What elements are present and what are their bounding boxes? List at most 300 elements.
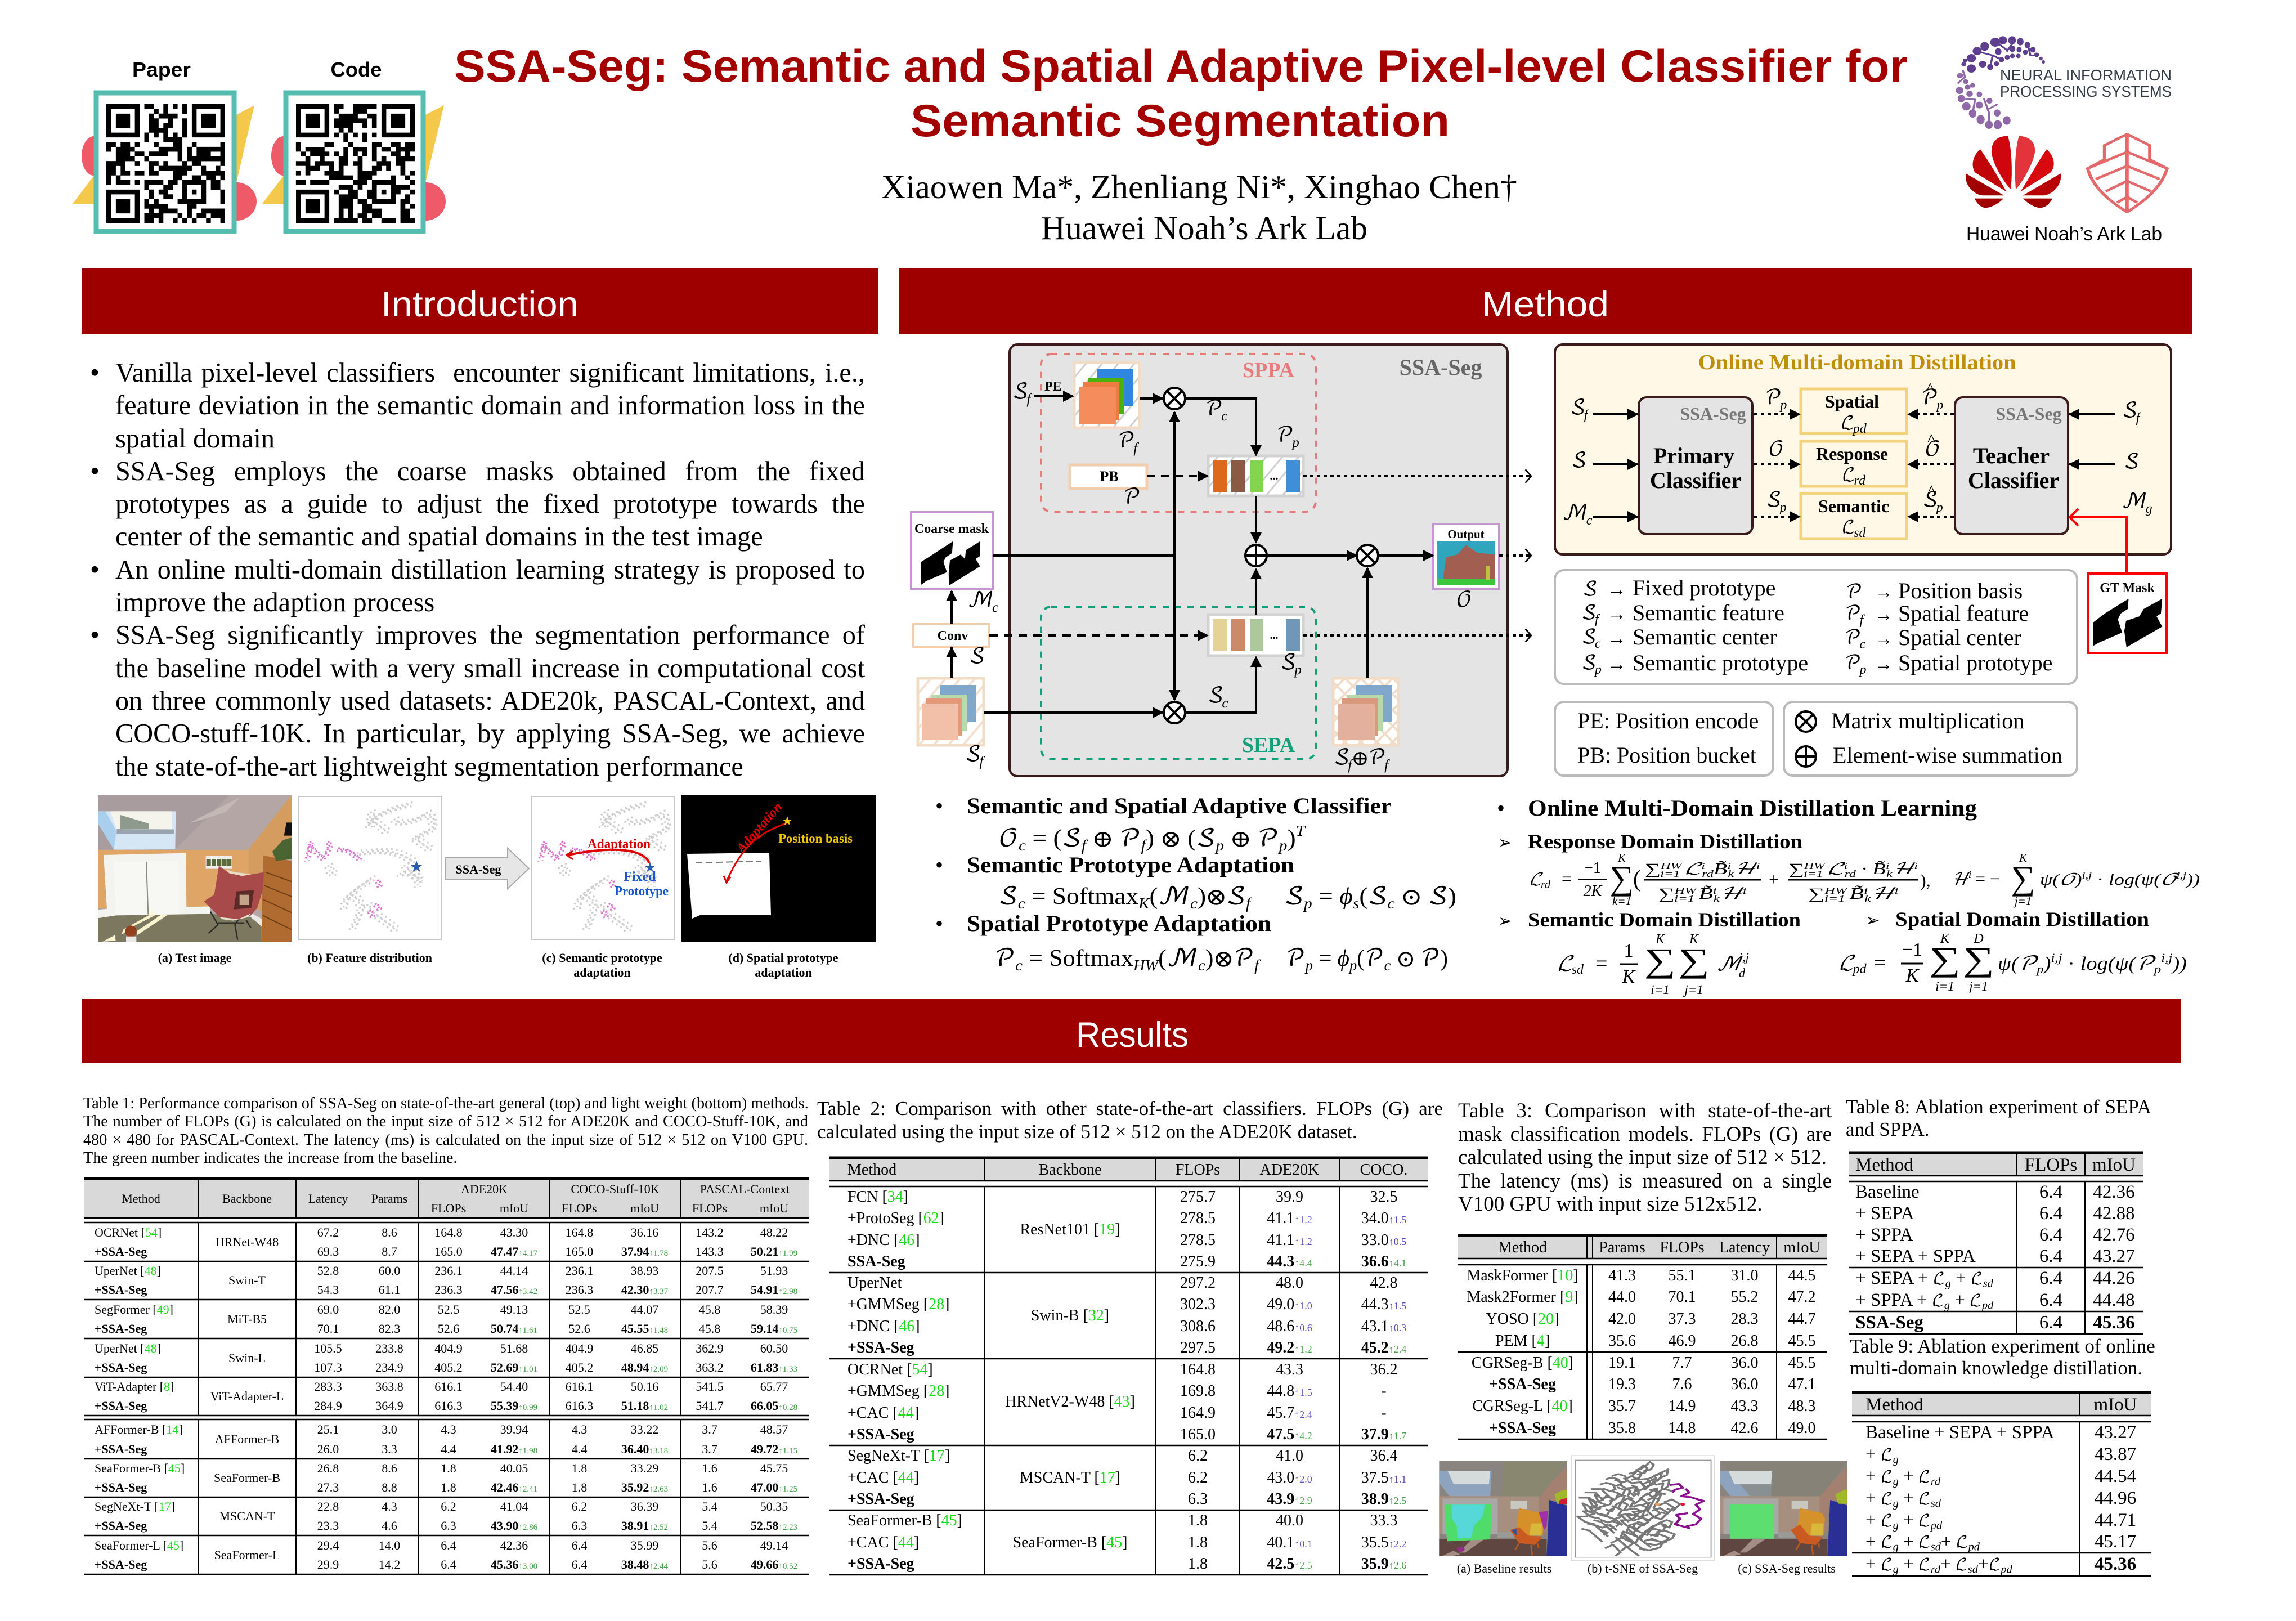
equation: semantic loss: ∑ <box>1678 942 1710 979</box>
table 2: 32.5 <box>1370 1188 1398 1206</box>
table 2: 297.5 <box>1180 1339 1216 1356</box>
equation: response loss: = − <box>1975 868 2000 889</box>
table 3: YOSO [20] <box>1486 1310 1559 1327</box>
qr decoration <box>73 105 257 221</box>
equation: K <box>1138 895 1151 912</box>
table 8: 44.48 <box>2093 1290 2135 1310</box>
table 1: 5.4 <box>702 1519 718 1533</box>
equation: ) ⊗ (𝒮 <box>1146 826 1216 852</box>
arrows: data flow <box>952 396 1531 713</box>
table 9: + ℒg + ℒrd+ ℒsd+ℒpd <box>1866 1554 2012 1576</box>
table 1: ViT-Adapter [8] <box>95 1380 174 1394</box>
table 2: 308.6 <box>1180 1317 1216 1335</box>
table 1: 47.00↑1.25 <box>751 1480 797 1494</box>
table 2: +GMMSeg [28] <box>847 1296 949 1313</box>
table 2: 41.1↑1.2 <box>1267 1232 1312 1248</box>
figure: semantic prototype adaptation: ★ <box>644 861 656 875</box>
table 1: 38.48↑2.44 <box>621 1557 668 1571</box>
legend: symbols: Fixed prototype <box>1633 575 1775 601</box>
table 2 <box>847 1161 1407 1573</box>
math labels: ℳ <box>967 589 994 612</box>
table 2: Method <box>847 1161 896 1179</box>
table 1: 362.9 <box>696 1341 724 1355</box>
table 1: +SSA-Seg <box>95 1442 147 1456</box>
legend: symbols: → <box>1874 629 1893 650</box>
title <box>454 41 1908 146</box>
loss boxes: Spatial <box>1825 391 1879 411</box>
math labels: p <box>1935 500 1943 515</box>
equation: spatial loss: p <box>2153 962 2161 976</box>
math labels: 𝒫 <box>1765 386 1782 409</box>
table 3: 35.6 <box>1608 1332 1636 1350</box>
legend: symbols: p <box>1594 662 1602 677</box>
section bar: Results: Results <box>1076 1015 1189 1055</box>
table 1: 60.50 <box>760 1341 788 1355</box>
table 1: 39.94 <box>500 1422 528 1436</box>
table 1: 48.57 <box>760 1422 788 1436</box>
equation: )⊗𝒫 <box>1205 946 1254 971</box>
table 2: 40.1↑0.1 <box>1267 1533 1312 1551</box>
equation: semantic loss: = <box>1595 952 1607 975</box>
table 8: FLOPs <box>2025 1155 2077 1175</box>
math labels: 𝒫 <box>1205 397 1223 420</box>
table 9: 43.87 <box>2095 1444 2136 1465</box>
equation: response loss: i <box>1701 861 1705 871</box>
table 1: SeaFormer-L <box>214 1548 280 1561</box>
math labels: c <box>992 600 998 615</box>
table 2: 37.9↑1.7 <box>1361 1426 1406 1443</box>
legend: symbols: → <box>1607 604 1626 625</box>
table 3: 48.3 <box>1788 1397 1815 1415</box>
table 1: 6.4 <box>441 1538 456 1552</box>
captions: result figures: (c) SSA-Seg results <box>1738 1561 1836 1575</box>
table 1: 236.3 <box>434 1283 463 1297</box>
table 3: 44.0 <box>1608 1288 1636 1306</box>
table 1: 23.3 <box>317 1519 339 1533</box>
introduction text: SSA-Seg employs the coarse masks obtained from the fixed <box>115 456 865 486</box>
table 8: 45.36 <box>2093 1313 2135 1333</box>
subheading: response: ➢ <box>1498 834 1512 852</box>
table 2: +SSA-Seg <box>847 1426 914 1443</box>
table 1: COCO-Stuff-10K <box>571 1182 660 1196</box>
heading: • <box>935 911 943 936</box>
table 1: 47.56↑3.42 <box>491 1283 537 1297</box>
table 8: + SEPA + SPPA <box>1855 1246 1976 1266</box>
equation: = Softmax <box>1025 884 1138 910</box>
table 2: COCO. <box>1360 1161 1407 1179</box>
table 2: 40.0 <box>1276 1512 1303 1529</box>
logo: Noah's Ark <box>2088 133 2167 212</box>
equation: spatial loss: i,j <box>2051 951 2062 965</box>
table 1: 67.2 <box>317 1225 339 1239</box>
table 1: 405.2 <box>434 1360 463 1374</box>
table 2: 41.1↑1.2 <box>1267 1210 1312 1227</box>
table 8: 6.4 <box>2039 1268 2062 1288</box>
introduction text: Vanilla pixel-level classifiers encounter significant limitations, i.e., <box>115 358 865 388</box>
table 1: 45.8 <box>699 1322 720 1336</box>
table 1: UperNet [48] <box>95 1341 161 1355</box>
table 8: 42.76 <box>2093 1225 2135 1245</box>
table 1: 1.8 <box>572 1461 587 1475</box>
table 1: FLOPs <box>562 1201 597 1215</box>
table 2: 1.8 <box>1188 1512 1208 1529</box>
table 1: +SSA-Seg <box>95 1399 147 1413</box>
equation: response loss: B̃ <box>1849 885 1864 903</box>
subheading: spatial: ➢ <box>1866 911 1880 930</box>
equation: spatial loss: i,j <box>2161 951 2172 965</box>
table 1: 4.4 <box>572 1442 587 1456</box>
table 9 caption <box>1850 1335 2153 1379</box>
table 8: mIoU <box>2092 1155 2136 1175</box>
table 2: 302.3 <box>1180 1296 1216 1313</box>
equation: response loss: k <box>1886 868 1893 879</box>
legend: symbols: 𝒮 <box>1581 626 1597 648</box>
math labels: f <box>1348 758 1353 773</box>
equation: response loss: = <box>1562 868 1572 889</box>
table 1: 51.18↑1.02 <box>621 1399 668 1413</box>
table 1: 36.39 <box>631 1499 658 1513</box>
table 1: 143.2 <box>696 1225 724 1239</box>
equation: response loss: rd <box>1541 879 1551 891</box>
equation: response loss: ℋ <box>1734 861 1758 878</box>
math labels: 𝒮 <box>1280 651 1296 674</box>
coarse mask <box>911 512 993 589</box>
table 1: 43.90↑2.86 <box>491 1519 537 1533</box>
section bar: Method <box>899 268 2192 334</box>
table 1: 107.3 <box>314 1360 342 1374</box>
equation: response loss: K <box>2019 851 2028 865</box>
table 3: 42.6 <box>1731 1420 1758 1436</box>
table 2: 43.0↑2.0 <box>1267 1469 1312 1486</box>
table 3: 45.5 <box>1788 1332 1815 1350</box>
table 1: 51.68 <box>500 1341 528 1355</box>
equation: response loss: B̃ <box>1714 861 1727 878</box>
table 2: 34.0↑1.5 <box>1361 1210 1406 1227</box>
table 3: FLOPs <box>1660 1238 1705 1256</box>
PB box <box>1070 465 1147 489</box>
table 2: 39.9 <box>1276 1188 1303 1206</box>
table 2: 297.2 <box>1180 1274 1216 1292</box>
SEPA module <box>1041 607 1316 759</box>
equation: 𝒫 <box>994 946 1014 971</box>
table 8: + SPPA <box>1855 1225 1913 1245</box>
figure: spatial prototype adaptation <box>681 795 876 942</box>
table 1: 52.58↑2.23 <box>751 1519 797 1533</box>
table 3: 47.2 <box>1788 1288 1815 1306</box>
equation: c <box>1015 957 1023 974</box>
equation: semantic loss: ℳ <box>1716 954 1743 975</box>
legend: symbols: Spatial prototype <box>1898 650 2052 675</box>
equation: semantic loss: K <box>1689 932 1699 947</box>
equation: response loss: k <box>1728 868 1734 879</box>
table 3: +SSA-Seg <box>1489 1376 1556 1393</box>
math labels: 𝒮 <box>1922 489 1938 511</box>
table 9: + ℒg + ℒsd+ ℒpd <box>1866 1532 1980 1553</box>
table 1: 61.83↑1.33 <box>751 1360 797 1374</box>
table 1: Swin-T <box>228 1273 266 1287</box>
table 2: +ProtoSeg [62] <box>847 1210 944 1227</box>
legend: operators: Matrix multiplication <box>1831 708 2024 733</box>
table 2: 42.5↑2.5 <box>1267 1555 1312 1573</box>
table 1: 234.9 <box>375 1360 403 1374</box>
equation: response loss: k <box>1864 893 1871 904</box>
conv box <box>913 624 989 647</box>
table 1: 33.22 <box>631 1422 658 1436</box>
equation: response loss: ), <box>1920 870 1931 890</box>
table 2: 38.9↑2.5 <box>1361 1490 1406 1508</box>
affiliation: Huawei Noah’s Ark Lab <box>1041 209 1367 247</box>
table 1: 50.74↑1.61 <box>491 1322 537 1336</box>
table 3: MaskFormer [10] <box>1467 1266 1578 1284</box>
equation: = <box>1313 946 1338 971</box>
table 1: HRNet-W48 <box>216 1235 279 1248</box>
text: • <box>90 358 100 388</box>
section bar: Introduction: Introduction <box>381 285 579 324</box>
table 1: 45.55↑1.48 <box>621 1322 668 1336</box>
table 1: 26.0 <box>317 1442 339 1456</box>
equation: response loss: + <box>1769 869 1779 889</box>
equation: response loss: ℋ <box>1720 885 1745 903</box>
equation: HW <box>1133 957 1160 974</box>
table 8: 6.4 <box>2039 1203 2062 1224</box>
table 1: mIoU <box>630 1201 659 1215</box>
equation: semantic loss: K <box>1622 966 1636 987</box>
table 2 frame <box>829 1158 1428 1575</box>
table 2 caption: calculated using the input size of 512 × 512 on the ADE20K dataset. <box>817 1121 1357 1143</box>
table 1: 5.6 <box>702 1538 718 1552</box>
table 3: PEM [4] <box>1495 1332 1550 1350</box>
header: code QR <box>262 58 446 231</box>
table 1: 35.99 <box>631 1538 658 1552</box>
equation: spatial loss: pd <box>1852 962 1867 977</box>
table 1: 45.36↑3.00 <box>491 1557 537 1571</box>
heading: • <box>1497 795 1505 821</box>
table 2: 45.7↑2.4 <box>1267 1404 1312 1422</box>
table 1: 45.8 <box>699 1302 720 1316</box>
table 1: 1.8 <box>441 1461 456 1475</box>
legend: symbols: 𝒫 <box>1846 581 1863 603</box>
table 1: 8.8 <box>382 1480 397 1494</box>
table 1: +SSA-Seg <box>95 1557 147 1571</box>
equation: response loss: i <box>1864 885 1868 896</box>
table 2: 47.5↑4.2 <box>1267 1426 1312 1443</box>
table 1: 46.85 <box>631 1341 658 1355</box>
title: SSA-Seg: Semantic and Spatial Adaptive Pixel-level Classifier for <box>454 41 1908 92</box>
table 3 caption: mask classification models. FLOPs (G) are <box>1458 1122 1832 1146</box>
table 1: 3.7 <box>702 1442 718 1456</box>
table 1: 6.4 <box>572 1538 587 1552</box>
equation: response loss: i <box>1756 861 1760 871</box>
table 8: 6.4 <box>2039 1313 2062 1333</box>
heading: Semantic and Spatial Adaptive Classifier <box>967 793 1392 818</box>
equation: c <box>1198 957 1205 974</box>
table 1: 236.1 <box>566 1264 593 1278</box>
table 2: 278.5 <box>1180 1232 1216 1248</box>
table 1: 54.3 <box>317 1283 339 1297</box>
qr card <box>96 93 234 231</box>
table 1 caption: 480 × 480 for PASCAL-Context. The latency (ms) is calculated on the input size of 512 × 512 on V100 GPU. <box>83 1131 808 1149</box>
table 1 caption <box>83 1095 809 1167</box>
table 1: Latency <box>308 1192 348 1206</box>
table 3: 41.3 <box>1608 1266 1636 1284</box>
table 1: 25.1 <box>317 1422 339 1436</box>
equation: c <box>1388 895 1395 912</box>
table 8 caption <box>1846 1096 2151 1140</box>
table 9 <box>1852 1394 2151 1576</box>
table 2: 36.4 <box>1370 1447 1398 1465</box>
table 1: 58.39 <box>760 1302 788 1316</box>
equation: ⊙ 𝒮) <box>1395 884 1456 910</box>
math labels: 𝒫 <box>1118 429 1135 453</box>
table 1: 66.05↑0.28 <box>751 1399 797 1413</box>
math labels: f <box>2136 411 2142 426</box>
math labels: c <box>1586 513 1593 528</box>
table 2: SSA-Seg <box>847 1253 905 1270</box>
equation: response loss: i,j <box>2082 870 2092 881</box>
equation: response loss: i <box>1894 885 1899 896</box>
equation: f <box>1082 837 1088 854</box>
table 1: 207.7 <box>696 1283 724 1297</box>
math labels: f <box>1133 441 1139 456</box>
lab name: Huawei Noah’s Ark Lab <box>1966 223 2162 245</box>
table 1: 29.9 <box>317 1557 339 1571</box>
table 8: + SPPA + ℒg + ℒpd <box>1855 1290 1993 1312</box>
table 2: 41.0 <box>1276 1447 1303 1465</box>
GT mask <box>2070 509 2167 653</box>
heading: • <box>935 852 943 877</box>
table 1: 49.72↑1.15 <box>751 1442 797 1456</box>
table 1: 616.1 <box>434 1380 463 1394</box>
equation: ⊕ 𝒫 <box>1224 826 1279 852</box>
equation: f <box>1254 957 1261 974</box>
table 2: Swin-B [32] <box>1031 1307 1109 1324</box>
legend: symbols: Semantic center <box>1633 624 1777 650</box>
table 9: + ℒg + ℒrd <box>1866 1466 1940 1488</box>
table 2: 165.0 <box>1180 1426 1216 1443</box>
table 2: 33.0↑0.5 <box>1361 1232 1406 1248</box>
semantic prototype block: ... <box>1270 629 1279 642</box>
equation: s <box>1353 895 1359 912</box>
table 1: AFFormer-B <box>215 1432 279 1446</box>
equation: )⊗𝒮 <box>1198 884 1246 910</box>
label: SSA-Seg: SSA-Seg <box>1400 355 1482 380</box>
section bar: Introduction <box>82 268 878 334</box>
equation: response loss: ∑ <box>1610 859 1634 897</box>
equation: response loss: i <box>1727 861 1731 871</box>
subheading: spatial: Spatial Domain Distillation <box>1895 908 2149 930</box>
equation: response loss: −1 <box>1584 859 1601 877</box>
table 1: 1.8 <box>441 1480 456 1494</box>
loss boxes: ℒ <box>1842 517 1855 537</box>
table 1: 22.8 <box>317 1499 339 1513</box>
table 2: SeaFormer-B [45] <box>1013 1533 1127 1551</box>
table 8 <box>1849 1154 2143 1334</box>
table 1: 70.1 <box>317 1322 339 1336</box>
equation: response loss: k <box>1714 893 1720 904</box>
table 1: 283.3 <box>314 1380 342 1394</box>
legend: symbols: Spatial center <box>1898 625 2021 650</box>
table 1: +SSA-Seg <box>95 1480 147 1494</box>
table 1: 616.3 <box>434 1399 463 1413</box>
table 1: FLOPs <box>692 1201 727 1215</box>
label: Code: Code <box>331 58 382 81</box>
table 2 caption: Table 2: Comparison with other state-of-the-art classifiers. FLOPs (G) are <box>817 1098 1443 1120</box>
equation: p <box>1214 837 1224 854</box>
table 1: 6.2 <box>572 1499 587 1513</box>
table 1: 364.9 <box>375 1399 403 1413</box>
equation: response loss: B̃ <box>1699 885 1713 903</box>
table 2: 35.5↑2.2 <box>1361 1533 1406 1551</box>
table 1: 49.66↑0.52 <box>751 1557 797 1571</box>
table 1: +SSA-Seg <box>95 1519 147 1533</box>
math labels: p <box>1291 435 1299 450</box>
table 3: 55.1 <box>1668 1266 1696 1284</box>
equation: spatial loss: ) <box>2042 953 2051 974</box>
table 1: 54.91↑2.98 <box>751 1283 797 1297</box>
equation: response loss <box>1529 851 2200 908</box>
equation: response loss: ℒ <box>1684 861 1703 878</box>
table 3: 19.1 <box>1608 1354 1636 1371</box>
captions: prototype figures: (a) Test image <box>158 951 232 965</box>
equation: p <box>1304 957 1313 974</box>
equation: response loss: i=1 <box>1674 893 1694 904</box>
table 1: 4.3 <box>441 1422 456 1436</box>
qr card <box>286 93 423 231</box>
text: • <box>90 456 100 486</box>
math labels: f <box>1026 392 1032 407</box>
table 2: 44.8↑1.5 <box>1267 1382 1312 1400</box>
table 1: mIoU <box>500 1201 528 1215</box>
math labels: 𝒪 <box>1456 589 1472 612</box>
table 1: 50.35 <box>760 1499 788 1513</box>
SPPA module <box>1041 354 1316 512</box>
math labels: f <box>1384 758 1390 773</box>
equation: semantic loss: ∑ <box>1644 942 1676 979</box>
equation: semantic loss: sd <box>1572 962 1584 977</box>
table 1: 54.40 <box>500 1380 528 1394</box>
table 1: 5.6 <box>702 1557 718 1571</box>
captions: prototype figures: adaptation <box>573 965 631 979</box>
legend: symbols: 𝒫 <box>1845 626 1862 648</box>
table 1: PASCAL-Context <box>700 1182 790 1196</box>
equation: spatial loss: = <box>1874 951 1886 975</box>
legend: symbols: f <box>1595 612 1600 627</box>
primary classifier: Classifier <box>1650 468 1741 493</box>
table 3: 7.7 <box>1672 1354 1692 1371</box>
table 3: 44.7 <box>1788 1310 1815 1327</box>
table 1: 52.5 <box>438 1302 459 1316</box>
math labels: 𝒮 <box>1570 396 1586 419</box>
equation <box>998 884 1456 912</box>
table 1: 4.4 <box>441 1442 456 1456</box>
equation: response loss: i <box>1743 885 1747 896</box>
table 1: 44.07 <box>631 1302 658 1316</box>
equation: response loss: j=1 <box>2013 894 2032 908</box>
logo: Huawei <box>1966 136 2061 208</box>
figure: t-SNE <box>1571 1455 1715 1561</box>
table 3: 19.3 <box>1608 1376 1636 1393</box>
equation: c <box>1384 957 1391 974</box>
table 1: 65.77 <box>760 1380 788 1394</box>
math labels: 𝒮 <box>1208 684 1223 707</box>
table 3: 43.3 <box>1731 1397 1758 1415</box>
equation: response loss: ∑ <box>1808 885 1819 903</box>
table 1: 3.3 <box>382 1442 397 1456</box>
equation: response loss: ℒ <box>1827 861 1846 878</box>
primary classifier <box>1639 397 1752 534</box>
math labels: 𝒮 <box>2122 399 2138 422</box>
table 2: 36.2 <box>1370 1361 1398 1378</box>
